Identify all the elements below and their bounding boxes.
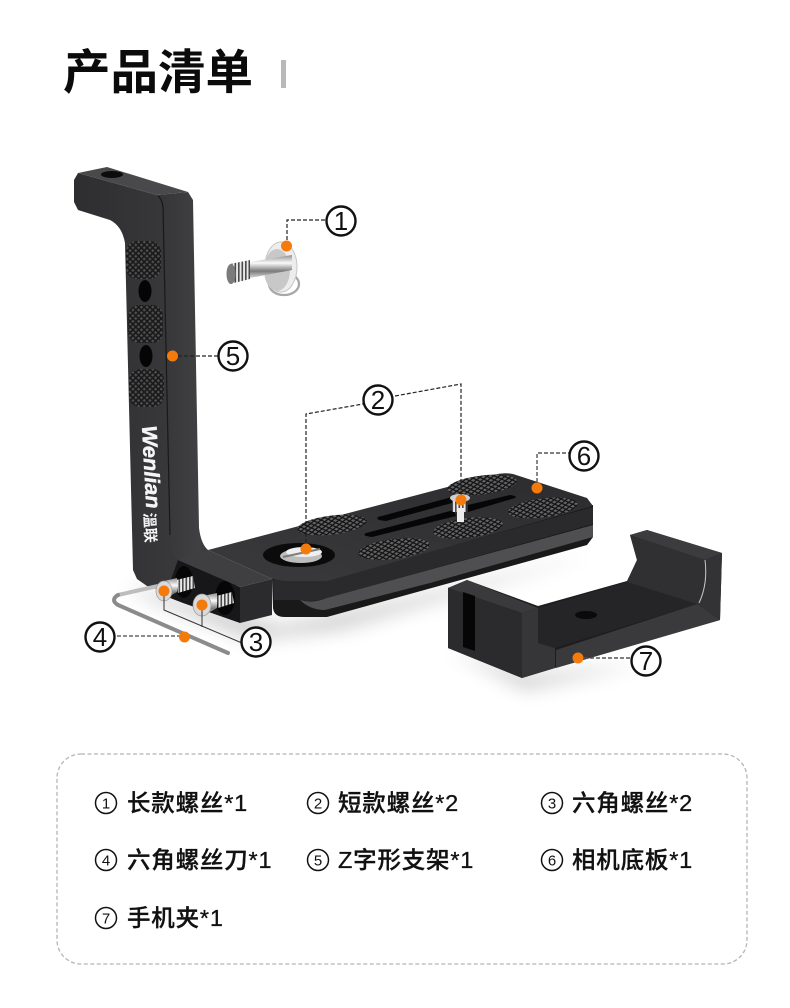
base plate hole: [263, 543, 335, 567]
clamp center hole: [575, 611, 597, 619]
callout digits: 3: [249, 627, 263, 657]
callout digits: 2: [371, 385, 385, 415]
callout dots: [158, 240, 584, 664]
plate side band: [273, 507, 593, 601]
bracket top screw hole: [101, 171, 123, 178]
clamp back wall inner: [627, 535, 706, 604]
block top face: [178, 550, 272, 587]
clamp block top face: [448, 580, 538, 613]
clamp base top face: [538, 582, 697, 648]
callout digits: 5: [226, 341, 240, 371]
product: L bracket with camera base plate: [74, 167, 593, 623]
parts list panel: [57, 754, 747, 964]
item 1: 长款螺丝*1: [127, 790, 248, 816]
callout digits: 6: [577, 441, 591, 471]
item 2: 短款螺丝*2: [338, 790, 459, 816]
part: phone clamp: [448, 530, 722, 678]
clamp back wall end: [697, 553, 722, 620]
leader 7: [578, 657, 631, 659]
item 6: 相机底板*1: [572, 847, 693, 873]
part: hex key and hex screws: [114, 576, 234, 653]
item 5: 5: [314, 852, 322, 870]
parts list: [96, 790, 693, 931]
item 4: 4: [102, 852, 110, 870]
brand logo: 溫联: [140, 512, 159, 543]
block hex holes: [175, 566, 235, 615]
clamp block front face: [448, 588, 522, 678]
short screw in hole: [280, 547, 322, 563]
title accent bar: [281, 60, 286, 88]
leader 5: [172, 355, 218, 357]
bracket top face: [78, 167, 188, 195]
ring: [269, 273, 299, 295]
clamp silhouette: [448, 530, 722, 678]
soft ground shadows: [125, 555, 640, 690]
plate lower body: [272, 505, 593, 617]
item 3: 3: [548, 796, 556, 812]
leader 2: [306, 384, 461, 549]
hex screw left: [156, 576, 195, 601]
block left face: [165, 560, 240, 623]
item 3: 六角螺丝*2: [572, 790, 693, 816]
item 2: 2: [314, 796, 322, 812]
tip: [226, 264, 236, 284]
clamp back wall top: [630, 530, 722, 560]
part: long screw with ring: [226, 242, 299, 295]
upright threaded holes: [138, 280, 152, 367]
callout number rings: [86, 206, 660, 676]
brand logo: Wenlian: [137, 425, 164, 509]
leader 4: [117, 635, 184, 637]
short screw in slot: [450, 494, 470, 522]
item 7: 手机夹*1: [127, 905, 224, 931]
leader 1: [287, 220, 326, 246]
knurled pads on plate: [296, 471, 579, 563]
callout digits: 7: [639, 646, 653, 676]
item 5: Z字形支架*1: [338, 847, 474, 873]
block end face: [240, 579, 272, 623]
leader 6: [537, 453, 569, 488]
item 6: 6: [548, 852, 556, 870]
callout digits: 1: [334, 206, 348, 236]
callout leaders: [117, 220, 631, 658]
item 1: 1: [102, 796, 110, 812]
bracket upright front face: [74, 173, 190, 600]
clamp block side face: [522, 608, 555, 678]
item 7: 7: [102, 910, 110, 928]
plate top face: [208, 473, 593, 581]
hex key long arm: [114, 595, 228, 653]
hex screw right: [193, 592, 234, 616]
plate slots: [364, 495, 516, 537]
bracket side face: [157, 192, 240, 590]
clamp front rail: [556, 604, 720, 668]
hex key short arm: [118, 586, 158, 595]
shaft: [250, 255, 292, 278]
title: 产品清单: [63, 47, 253, 100]
bracket edge highlight: [158, 196, 170, 535]
callout digits: 4: [93, 622, 107, 652]
callout digits: [93, 206, 653, 676]
plate lower lighter band: [300, 525, 593, 610]
knurled pads on upright: [126, 241, 164, 407]
brand logo: [137, 425, 164, 543]
clamp block slot: [463, 592, 475, 651]
clamp wall highlight: [699, 560, 706, 603]
item 4: 六角螺丝刀*1: [127, 847, 272, 873]
thread: [230, 260, 250, 284]
disc: [265, 242, 297, 292]
leader 3: [164, 591, 242, 643]
